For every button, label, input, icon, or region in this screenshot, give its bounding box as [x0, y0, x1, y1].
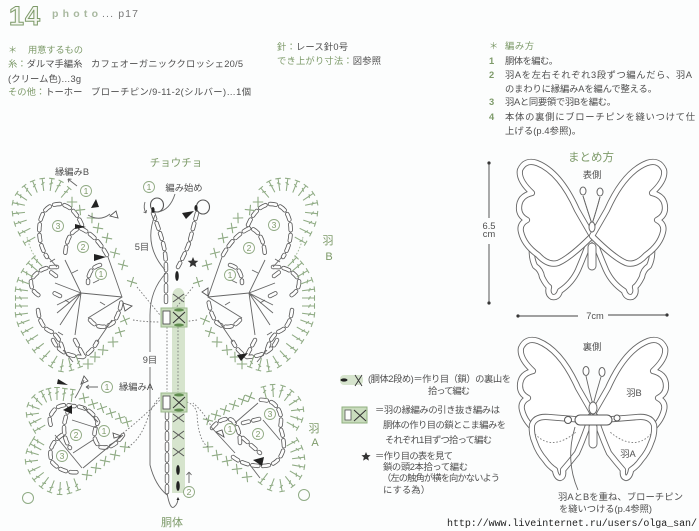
- arrow: working direction: [186, 472, 192, 483]
- start-of-work label: [158, 182, 203, 212]
- legend row: star: にする為）: [383, 484, 430, 495]
- materials list: 糸：ダルマ手編糸: [8, 58, 82, 69]
- legend row: body second row: (胴体2段め)＝作り目（鎖）の裏山を: [368, 373, 511, 384]
- back view butterfly: 裏側: [583, 341, 601, 352]
- materials list: (クリーム色)…3g: [8, 73, 81, 84]
- hook and finished size: [277, 41, 381, 66]
- title: pattern number and photo page: [9, 1, 138, 31]
- row number circles: 2: [74, 430, 79, 440]
- back view butterfly: 羽B: [626, 388, 642, 398]
- title: pattern number and photo page: photo: [52, 8, 98, 20]
- row number circles: [52, 182, 280, 498]
- materials list: カフェオーガニッククロッシェ20/5: [91, 59, 243, 69]
- label: wing B: 羽: [322, 235, 334, 247]
- row number circles: 1: [228, 270, 233, 280]
- label: wing B: [322, 235, 334, 263]
- row counting lines with labels: 5目: [135, 242, 149, 252]
- row number circles: 2: [247, 243, 252, 253]
- back view caption: [558, 491, 683, 514]
- row number circles: 1: [84, 186, 89, 196]
- height dimension: cm: [483, 229, 495, 239]
- legend: [340, 373, 511, 495]
- row number circles: 3: [60, 451, 65, 461]
- row counting lines with labels: 9目: [143, 355, 157, 365]
- start-of-work label: 編み始め: [165, 182, 203, 193]
- row number circles: 1: [228, 424, 233, 434]
- source url: http://www.liveinternet.ru/users/olga_san/: [447, 518, 697, 530]
- row number circles: 3: [268, 409, 273, 419]
- instructions steps: 編み方: [505, 40, 534, 51]
- fasten-off and join markers: [57, 199, 264, 466]
- height dimension: 6.5: [483, 221, 495, 231]
- label: wing A: 羽: [308, 423, 320, 435]
- row number circles: 2: [81, 242, 86, 252]
- row counting lines with labels: [135, 215, 167, 495]
- label: edging A: [86, 381, 154, 392]
- back view butterfly: 羽A: [620, 449, 637, 459]
- green join box lower: [161, 393, 187, 412]
- finishing heading: まとめ方: [568, 150, 614, 164]
- legend row: joining box: ＝羽の縁編みの引き抜き編みは: [375, 404, 500, 415]
- body double crochet marks: [173, 294, 184, 491]
- title: pattern number and photo page: ... p17: [102, 8, 138, 20]
- label: edging A: 縁編みA: [119, 381, 154, 392]
- height dimension: [483, 161, 495, 305]
- instructions steps: 上げる(p.4参照)。: [505, 125, 581, 136]
- label: wing A: [308, 423, 320, 449]
- legend row: joining box: それぞれ1目ずつ拾って編む: [385, 434, 492, 445]
- row number circles: 2: [187, 487, 192, 497]
- green join box upper: [161, 308, 187, 327]
- instructions steps: のまわりに縁編みAを編んで整える。: [505, 83, 657, 94]
- label: wing B: B: [325, 251, 333, 263]
- front view butterfly: [519, 162, 665, 297]
- wing A left: [22, 394, 160, 504]
- instructions steps: 4: [489, 112, 495, 122]
- back view butterfly: [520, 340, 666, 490]
- instructions steps: 2: [489, 70, 494, 80]
- row number circles: 3: [272, 220, 277, 230]
- instructions steps: [489, 40, 695, 136]
- icon: star: [188, 257, 198, 267]
- instructions steps: 羽Aと同要領で羽Bを編む。: [505, 96, 616, 107]
- legend row: joining box: [342, 404, 506, 445]
- front view butterfly: 表側: [583, 169, 601, 180]
- row number circles: 1: [102, 426, 107, 436]
- instructions steps: 胴体を編む。: [505, 55, 558, 66]
- row number circles: 1: [105, 382, 110, 392]
- instructions steps: 本体の裏側にブローチピンを縫いつけて仕: [505, 111, 695, 122]
- hook and finished size: 針：レース針0号: [277, 41, 348, 52]
- width dimension: [516, 311, 669, 321]
- instructions steps: 羽Aを左右それぞれ3段ずつ編んだら、羽A: [505, 69, 693, 80]
- body green strip: [167, 288, 185, 493]
- label: edging B: 縁編みB: [55, 166, 89, 177]
- body label: 胴体: [161, 515, 183, 529]
- legend row: body second row: [340, 373, 511, 396]
- label: edging B: [55, 166, 89, 186]
- row number circles: 3: [56, 221, 61, 231]
- instructions steps: 3: [489, 97, 494, 107]
- back view caption: 羽AとBを重ね、ブローチピン: [558, 491, 683, 502]
- body chain and antennae: [150, 198, 210, 507]
- row number circles: 1: [147, 182, 152, 192]
- legend row: star: [361, 450, 500, 495]
- title: pattern number and photo page: 14: [9, 1, 41, 31]
- legend row: star: 鎖の頭2本拾って編む: [383, 461, 468, 472]
- arrow: antenna direction: [144, 202, 146, 213]
- legend row: star: ＝作り目の表を見て: [375, 450, 453, 461]
- wing B left: [19, 185, 160, 365]
- wing B right: [170, 185, 311, 365]
- row number circles: 2: [256, 429, 261, 439]
- legend row: joining box: 胴体の作り目の鎖とこま編みを: [383, 419, 506, 430]
- instructions steps: ＊: [489, 41, 498, 51]
- crochet diagram heading: チョウチョ: [150, 157, 202, 169]
- width dimension: 7cm: [586, 311, 604, 321]
- label: wing A: A: [311, 437, 319, 449]
- back view caption: を縫いつける(p.4参照): [559, 503, 652, 514]
- hook and finished size: でき上がり寸法：図参照: [277, 55, 381, 66]
- materials list: [8, 44, 251, 97]
- materials list: 用意するもの: [28, 44, 83, 55]
- materials list: ブローチピン/9-11-2(シルバー)…1個: [91, 86, 251, 97]
- materials list: その他：トーホー: [8, 86, 82, 97]
- instructions steps: 1: [489, 56, 494, 66]
- wing A right: [187, 391, 310, 500]
- legend row: star: （左の触角が横を向かないよう: [382, 472, 500, 483]
- materials list: ＊: [8, 45, 17, 55]
- row number circles: 1: [99, 269, 104, 279]
- legend row: body second row: 拾って編む: [428, 385, 470, 396]
